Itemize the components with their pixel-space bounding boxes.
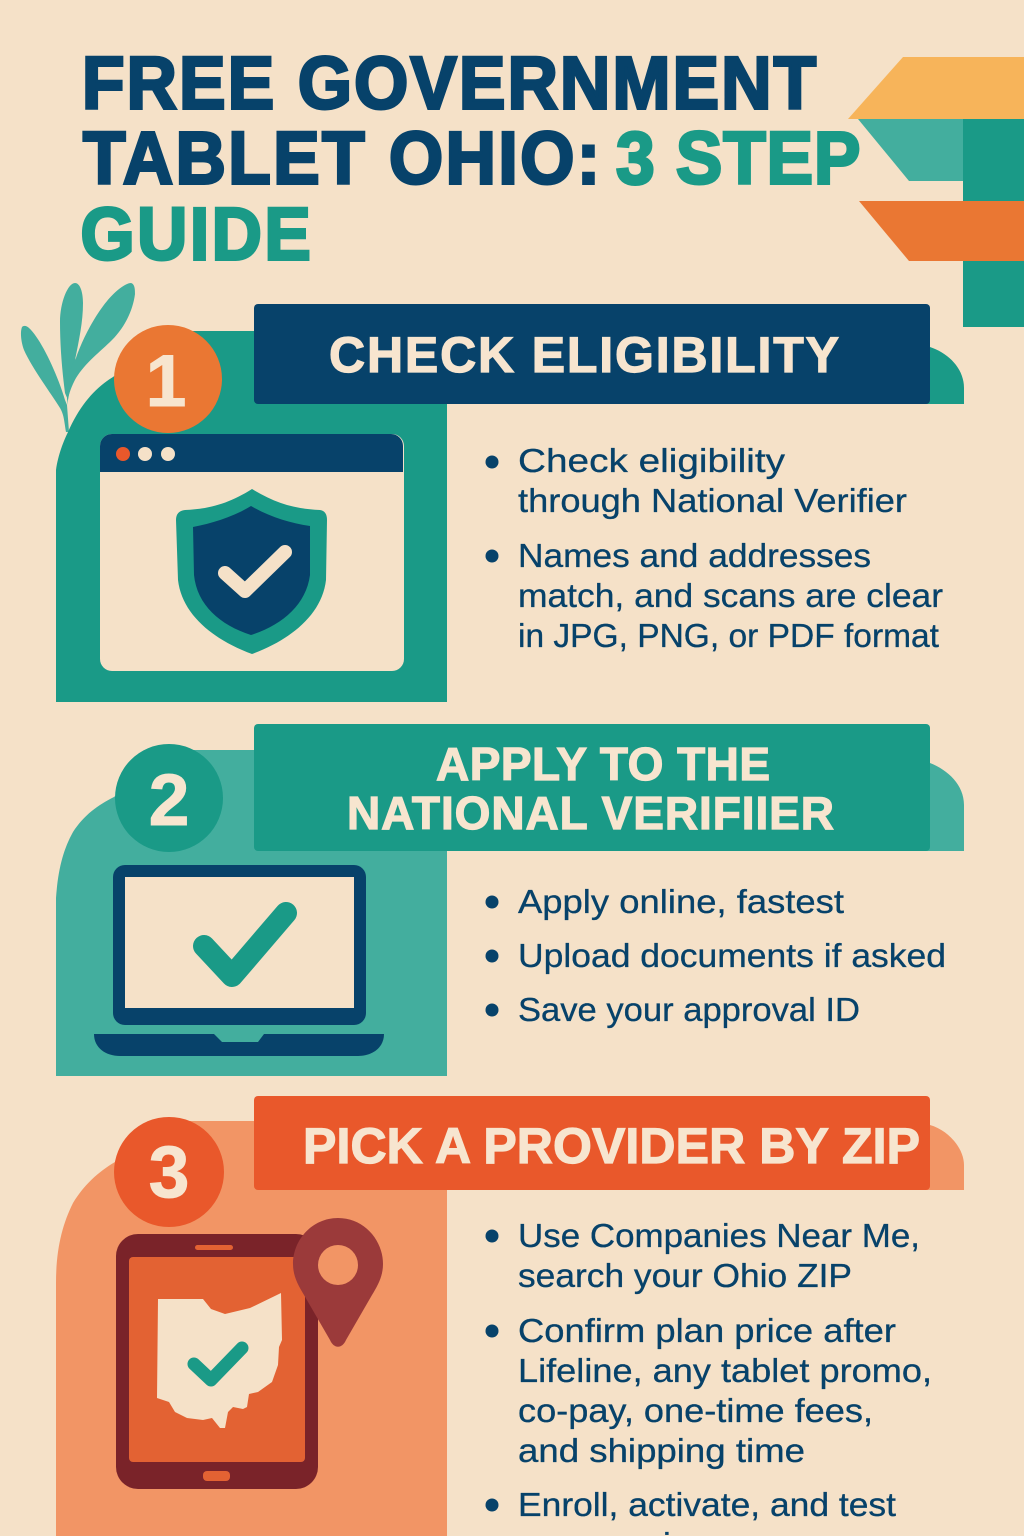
icon: laptop with check mark [94,865,384,1056]
panel 1 background [56,331,964,702]
step 1 number badge: 1 [146,341,186,422]
step 3 bullet list: Enroll, activate, and test [518,1486,896,1523]
title: 3 STEP [616,118,860,200]
panel: step 3 pick a provider [56,1096,964,1536]
step 1 bullet list: match, and scans are clear [518,577,943,614]
step 3 bullet list: search your Ohio ZIP [518,1257,852,1294]
step 2 bullet list: Apply online, fastest [518,883,844,920]
step 1 bullet list [486,442,943,654]
step 1 bullet list: through National Verifier [518,482,907,519]
icon: plant leaves [21,283,135,432]
step 3 bullet list [486,1217,932,1536]
step 1 banner [254,304,930,404]
decorative corner shapes [848,57,1024,327]
panel 3 background [56,1121,964,1536]
step 3 bullet list: Confirm plan price after [518,1312,896,1349]
step 3 banner: PICK A PROVIDER BY ZIP [303,1118,920,1174]
step 1 number badge [114,325,222,433]
step 2 bullet list [486,883,946,1028]
step 2 number badge [115,744,223,852]
step 2 banner: NATIONAL VERIFIIER [347,787,834,839]
icon: map pin [293,1218,383,1347]
step 3 bullet list: Lifeline, any tablet promo, [518,1352,932,1389]
title [80,43,860,276]
step 2 bullet list: Upload documents if asked [518,937,946,974]
step 3 bullet list: co-pay, one-time fees, [518,1392,873,1429]
step 1 banner: CHECK ELIGIBILITY [329,327,839,383]
step 1 bullet list: Check eligibility [518,442,786,479]
panel: step 2 apply [56,724,964,1076]
icon: tablet with Ohio map [116,1234,318,1489]
step 3 number badge [114,1117,224,1227]
step 3 number badge: 3 [149,1132,189,1213]
icon: browser window with shield [100,434,404,671]
step 3 bullet list: and shipping time [518,1432,805,1469]
panel: step 1 check eligibility [56,304,964,702]
title: TABLET OHIO: [83,118,600,200]
step 2 banner [254,724,930,851]
step 3 bullet list: Use Companies Near Me, [518,1217,920,1254]
step 1 bullet list: Names and addresses [518,537,871,574]
title: FREE GOVERNMENT [82,43,816,125]
panel 2 background [56,750,964,1076]
step 1 bullet list: in JPG, PNG, or PDF format [518,617,939,654]
step 2 banner: APPLY TO THE [436,738,770,790]
title: GUIDE [80,194,311,276]
step 2 number badge: 2 [149,760,189,841]
step 2 bullet list: Save your approval ID [518,991,860,1028]
step 3 banner [254,1096,930,1190]
